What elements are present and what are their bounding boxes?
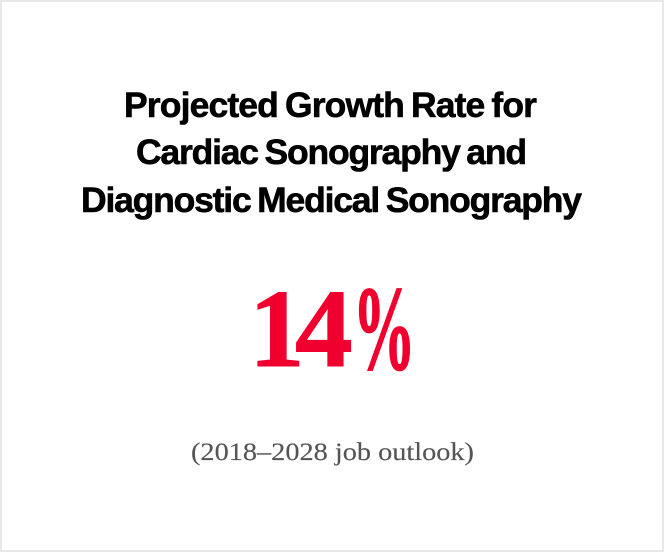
title: Projected Growth Rate for [124, 85, 537, 125]
big number: 14% [249, 262, 415, 395]
big number: 14%: % [353, 262, 415, 395]
big number: 14%: 1 [249, 268, 304, 391]
big number: 14%: 4 [295, 268, 353, 391]
title: Cardiac Sonography and [136, 132, 527, 172]
title: Diagnostic Medical Sonography [81, 180, 582, 220]
title [81, 85, 582, 220]
subtitle: job outlook: (2018–2028 job outlook) [191, 439, 474, 466]
